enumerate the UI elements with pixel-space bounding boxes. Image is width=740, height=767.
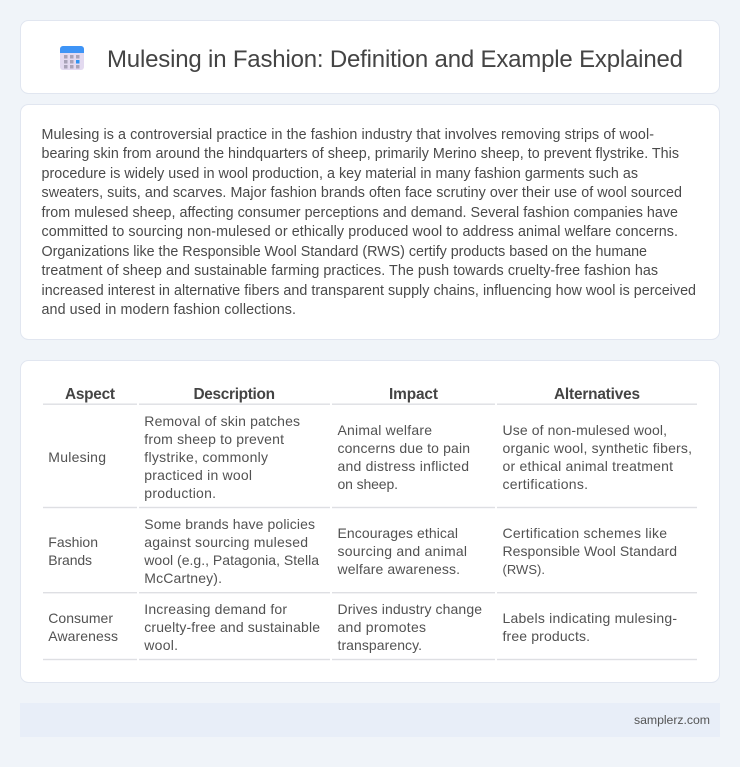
- table row: Consumer Awareness: Increasing demand for: [144, 601, 287, 617]
- text block: definition: sweaters, suits, and scarves. Major fashion brands often face scrutiny over their use of wool sourced: [42, 185, 682, 201]
- table row: Fashion Brands: wool (e.g., Patagonia, Stella: [143, 552, 319, 568]
- table row: Consumer Awareness: Drives industry change: [338, 601, 482, 617]
- text block: definition: increased interest in alternative fibers and transparent supply chains, influencing how wool is perceived: [42, 283, 696, 299]
- icon: calendar: [60, 46, 84, 70]
- table row: Mulesing: from sheep to prevent: [144, 431, 284, 447]
- table row: Mulesing: flystrike, commonly: [144, 449, 268, 465]
- table row: Fashion Brands: (RWS).: [502, 562, 545, 577]
- table row: Mulesing: Use of non-mulesed wool,: [502, 422, 667, 438]
- text block: definition: Organizations like the Responsible Wool Standard (RWS) certify products based on the humane: [42, 244, 647, 260]
- table row: Fashion Brands: against sourcing mulesed: [144, 534, 308, 550]
- table row: Mulesing: or ethical animal treatment: [502, 458, 673, 474]
- table row: Fashion Brands: McCartney).: [144, 570, 222, 586]
- footer bar: [20, 703, 720, 737]
- table header row: Impact: [389, 386, 438, 403]
- table row: Consumer Awareness: Labels indicating mulesing-: [502, 610, 677, 626]
- table row: Fashion Brands: Fashion: [48, 534, 98, 550]
- table row: Consumer Awareness: wool.: [143, 637, 178, 653]
- table row: Fashion Brands: welfare awareness.: [336, 561, 460, 577]
- table row: Consumer Awareness: transparency.: [338, 637, 422, 653]
- title: Mulesing in Fashion: Definition and Example Explained: [107, 46, 683, 73]
- panel: intro paragraph: [20, 104, 720, 340]
- panel: header: [20, 20, 720, 94]
- table row: Fashion Brands: Responsible Wool Standard: [502, 543, 677, 559]
- table row: Mulesing: concerns due to pain: [338, 440, 470, 456]
- table row: Mulesing: Animal welfare: [338, 422, 432, 438]
- text block: definition: and used in modern fashion collections.: [42, 302, 296, 318]
- table header row: Description: [194, 386, 275, 403]
- table row: Consumer Awareness: and promotes: [338, 619, 426, 635]
- table row: Fashion Brands: [48, 516, 677, 586]
- table row: Mulesing: organic wool, synthetic fibers,: [502, 440, 692, 456]
- table row: Fashion Brands: sourcing and animal: [338, 543, 467, 559]
- table row: Fashion Brands: Certification schemes like: [502, 525, 667, 541]
- table row: Mulesing: practiced in wool: [144, 467, 252, 483]
- table row: Mulesing: and distress inflicted: [338, 458, 469, 474]
- text block: definition: Mulesing is a controversial practice in the fashion industry that involves removing strips of wool-: [42, 127, 654, 143]
- text block: definition: committed to sourcing non-mulesed or ethically produced wool to address animal welfare concerns.: [42, 224, 678, 240]
- table row: Consumer Awareness: cruelty-free and sustainable: [144, 619, 320, 635]
- text block: definition: [42, 127, 696, 318]
- table row: Mulesing: Removal of skin patches: [144, 413, 300, 429]
- table header row: Aspect: [65, 386, 115, 403]
- table row: Mulesing: certifications.: [502, 476, 588, 492]
- footer credit: samplerz.com: [634, 713, 710, 727]
- table row: Fashion Brands: Encourages ethical: [338, 525, 458, 541]
- table header row: [65, 386, 640, 403]
- table row: Consumer Awareness: free products.: [502, 628, 590, 644]
- table row: Mulesing: Mulesing: [48, 449, 106, 465]
- text block: definition: treatment of sheep and sustainable farming practices. The push towards cruelty-free fashion has: [42, 263, 658, 279]
- text block: definition: bearing skin from around the hindquarters of sheep, primarily Merino sheep, to prevent flystrike. This: [42, 146, 679, 162]
- table row: Consumer Awareness: Consumer: [48, 610, 113, 626]
- panel: comparison table: [20, 360, 720, 682]
- table row: Consumer Awareness: Awareness: [48, 628, 118, 644]
- table row: Mulesing: on sheep.: [338, 476, 398, 492]
- table row: Fashion Brands: Brands: [48, 552, 92, 568]
- text block: definition: procedure is widely used in wool production, a key material in many fashion garments such as: [42, 166, 638, 182]
- table row: Consumer Awareness: [48, 601, 677, 653]
- table row: Fashion Brands: Some brands have policies: [144, 516, 315, 532]
- table header row: Alternatives: [554, 386, 640, 403]
- text block: definition: from mulesed sheep, affecting consumer perceptions and demand. Several fashion companies have: [42, 205, 678, 221]
- table row: Mulesing: production.: [144, 485, 216, 501]
- table row: Mulesing: [48, 413, 692, 501]
